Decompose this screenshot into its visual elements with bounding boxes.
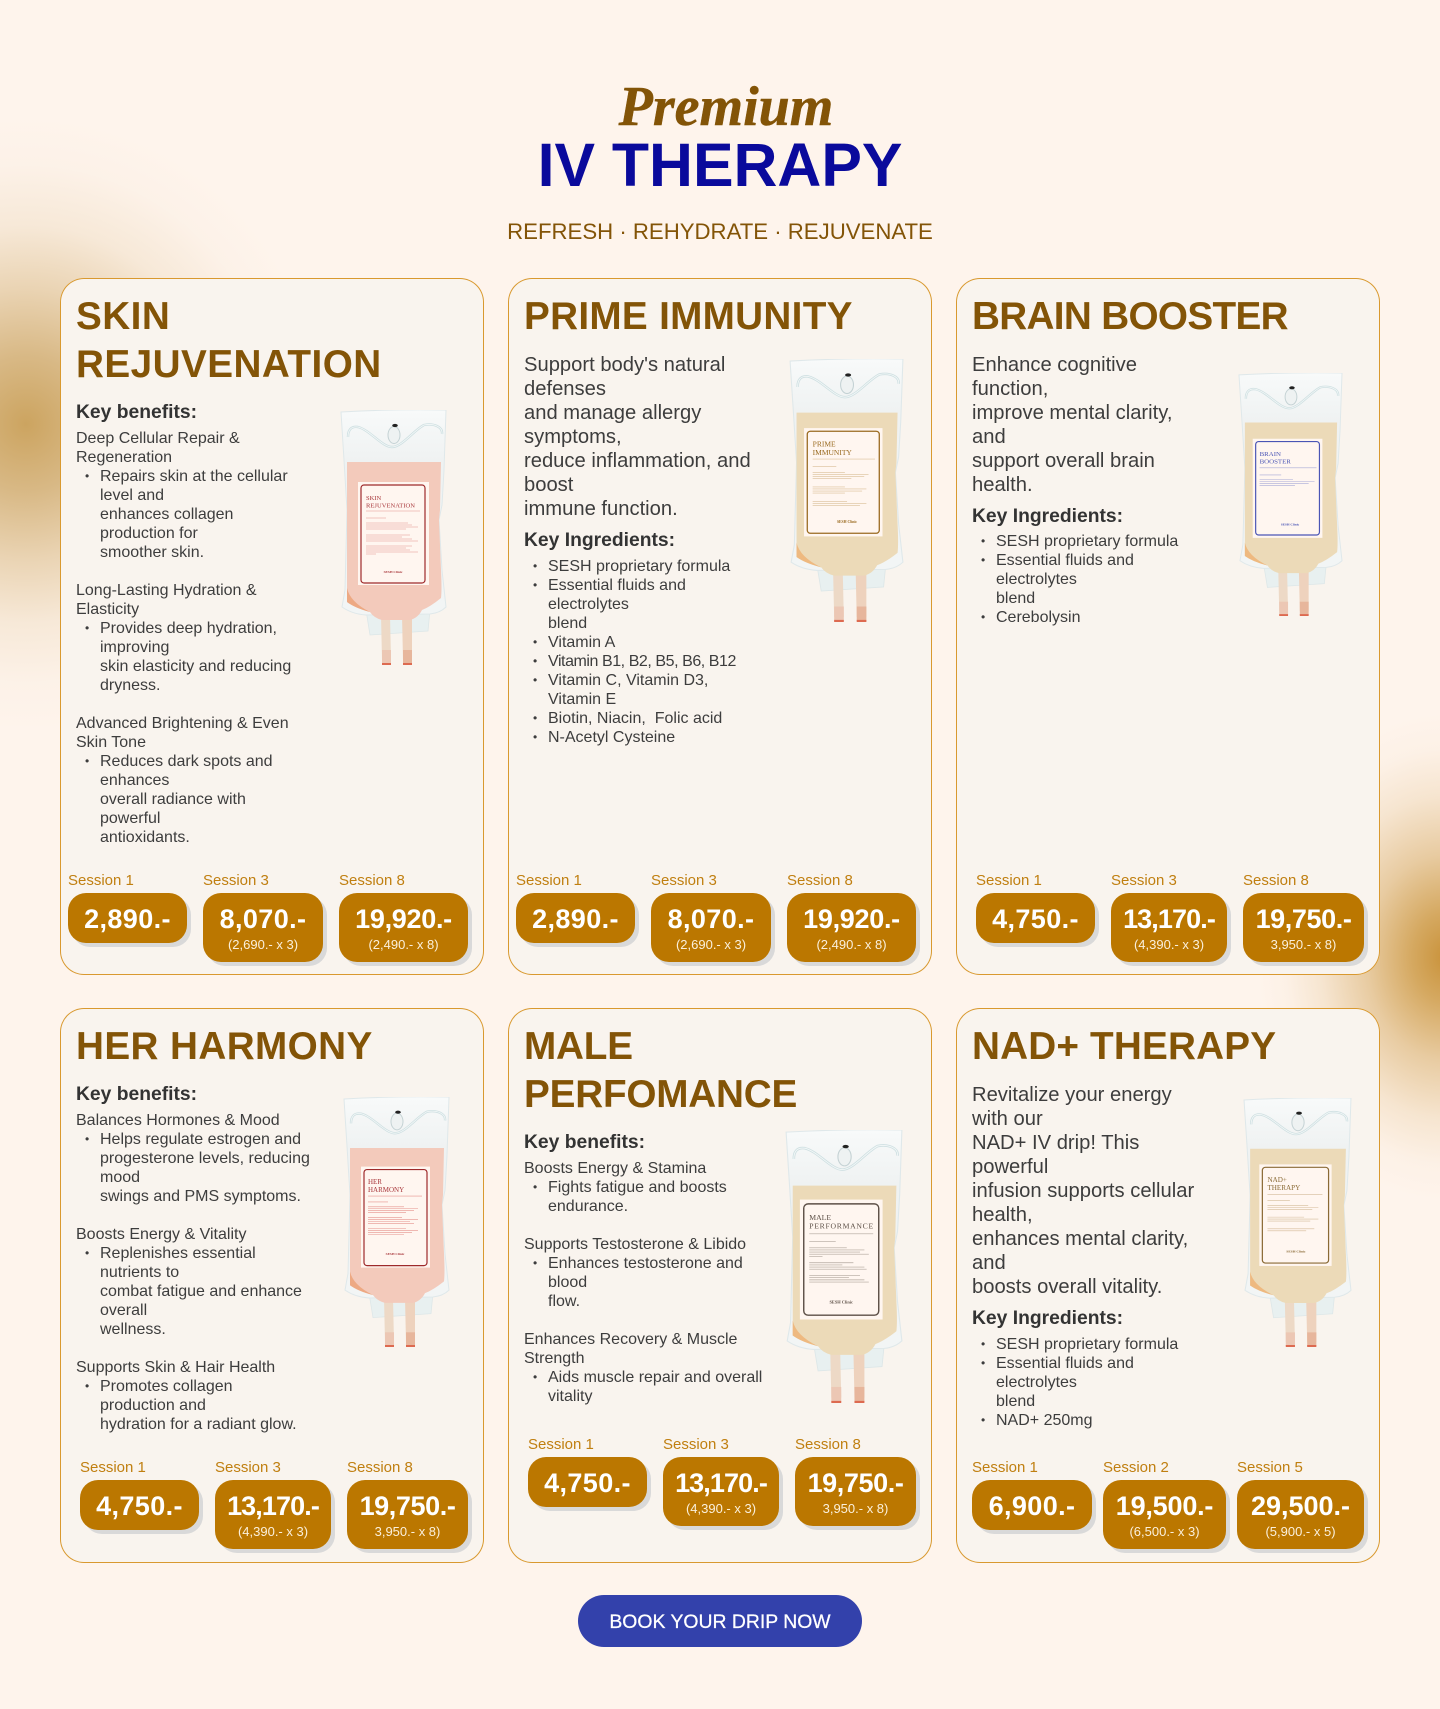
button: book your drip now (578, 1595, 862, 1647)
benefits list: production and (100, 1396, 206, 1414)
panel: skin rejuvenation (60, 278, 484, 975)
session 8 price (787, 872, 920, 966)
ingredients list (982, 532, 1178, 626)
benefits list: antioxidants. (100, 828, 190, 846)
benefits list: dryness. (100, 676, 160, 694)
ingredients list: blend (996, 1392, 1035, 1410)
title: Premium: Premium (619, 76, 833, 138)
intro text: improve mental clarity, (972, 402, 1172, 424)
benefits list: nutrients to (100, 1264, 179, 1280)
session 8 price (1243, 872, 1368, 966)
intro text: health. (972, 474, 1033, 496)
session 3 price: (2,690.- x 3) (228, 937, 298, 952)
intro text: Revitalize your energy (972, 1084, 1172, 1106)
icon: IV bag her harmony: HARMONY (368, 1187, 404, 1194)
benefits list: Deep Cellular Repair & (76, 430, 240, 446)
session 8 price: 3,950.- x 8) (1271, 937, 1336, 952)
ingredients list: Vitamin B1, B2, B5, B6, B12 (548, 652, 736, 670)
ingredients list (982, 1336, 1178, 1428)
session 8 price (347, 1458, 472, 1553)
heading (524, 1025, 797, 1116)
session 3 price (1111, 872, 1231, 966)
ingredients list: Biotin, Niacin, Folic acid (548, 710, 722, 726)
benefits list (76, 1112, 310, 1432)
session 1 price: Session 1 (528, 1436, 594, 1452)
ingredients list: Vitamin C, Vitamin D3, (548, 672, 708, 688)
key ingredients heading: Key Ingredients: (524, 530, 675, 551)
benefits list: skin elasticity and reducing (100, 658, 291, 674)
session 1 price: 2,890.- (532, 904, 619, 934)
heading: SKIN (76, 295, 170, 338)
intro text: infusion supports cellular (972, 1180, 1194, 1202)
benefits list: improving (100, 638, 169, 656)
icon: IV bag nad+ therapy: NAD+ (1267, 1176, 1287, 1184)
key ingredients heading: Key Ingredients: (972, 506, 1123, 527)
icon: IV bag male performance (786, 1130, 902, 1403)
icon: IV bag male performance: PERFORMANCE (809, 1222, 874, 1230)
benefits list: Provides deep hydration, (100, 620, 277, 636)
benefits list: wellness. (100, 1320, 166, 1338)
ingredients list: electrolytes (548, 596, 629, 612)
session 1 price: 4,750.- (992, 904, 1079, 934)
session 3 price: (4,390.- x 3) (1134, 937, 1204, 952)
session 5 price: Session 5 (1237, 1458, 1303, 1476)
heading: REJUVENATION (76, 343, 382, 386)
benefits list: mood (100, 1168, 140, 1186)
ingredients list: SESH proprietary formula (996, 532, 1178, 550)
benefits list: Boosts Energy & Vitality (76, 1226, 246, 1242)
intro text: Support body's natural (524, 354, 725, 376)
session 1 price: 4,750.- (544, 1468, 631, 1498)
session 3 price (651, 872, 775, 966)
session 8 price (795, 1436, 920, 1530)
session 3 price: Session 3 (215, 1458, 281, 1476)
session 8 price: 3,950.- x 8) (375, 1524, 440, 1539)
panel: male performance (508, 1008, 932, 1563)
session 3 price (203, 872, 327, 966)
button: book your drip now: BOOK YOUR DRIP NOW (609, 1611, 831, 1633)
intro text: immune function. (524, 498, 678, 520)
benefits list: Supports Skin & Hair Health (76, 1358, 275, 1376)
icon: IV bag skin rejuvenation: REJUVENATION (366, 502, 415, 510)
icon: IV bag brain booster: BOOSTER (1260, 459, 1291, 465)
session 3 price: 13,170.- (227, 1491, 319, 1521)
session 8 price (339, 872, 472, 966)
benefits list: vitality (548, 1388, 592, 1404)
benefits list: Balances Hormones & Mood (76, 1112, 280, 1128)
icon: IV bag prime immunity: IMMUNITY (813, 448, 853, 457)
session 3 price: (2,690.- x 3) (676, 937, 746, 952)
session 2 price: 19,500.- (1116, 1491, 1213, 1521)
ingredients list: electrolytes (996, 570, 1077, 588)
heading: HER HARMONY (76, 1025, 373, 1068)
benefits list (76, 430, 291, 846)
benefits list: swings and PMS symptoms. (100, 1188, 301, 1204)
heading (76, 295, 382, 386)
ingredients list: Cerebolysin (996, 608, 1080, 626)
session 2 price: Session 2 (1103, 1458, 1169, 1476)
session 1 price: Session 1 (80, 1458, 146, 1476)
key benefits heading: Key benefits: (76, 402, 197, 423)
session 1 price: Session 1 (972, 1458, 1038, 1476)
icon: IV bag prime immunity: SESH Clinic (837, 520, 857, 524)
icon: IV bag brain booster: SESH Clinic (1281, 523, 1300, 526)
benefits list: progesterone levels, reducing (100, 1150, 310, 1166)
session 3 price: 13,170.- (1123, 904, 1215, 934)
session 3 price: Session 3 (203, 872, 269, 888)
session 8 price: Session 8 (787, 872, 853, 888)
session 8 price: 19,750.- (360, 1491, 455, 1521)
benefits list: Replenishes essential (100, 1244, 256, 1262)
ingredients list: Essential fluids and (996, 1354, 1134, 1372)
session 5 price (1237, 1458, 1368, 1553)
intro text: and manage allergy (524, 402, 701, 424)
benefits list: Skin Tone (76, 734, 146, 750)
ingredients list: electrolytes (996, 1374, 1077, 1390)
benefits list: Elasticity (76, 600, 139, 618)
session 8 price: Session 8 (339, 872, 405, 888)
session 8 price: Session 8 (795, 1436, 861, 1452)
session 2 price (1103, 1458, 1230, 1553)
session 8 price: 19,750.- (808, 1468, 903, 1498)
heading: PRIME IMMUNITY (524, 295, 853, 338)
intro text: NAD+ IV drip! This (972, 1132, 1139, 1154)
benefits list: level and (100, 486, 164, 504)
session 1 price: 2,890.- (84, 904, 171, 934)
session 3 price (215, 1458, 335, 1553)
benefits list: endurance. (548, 1198, 628, 1214)
benefits list: Repairs skin at the cellular (100, 468, 288, 484)
session 1 price (80, 1458, 203, 1534)
session 1 price (976, 872, 1099, 947)
ingredients list: SESH proprietary formula (548, 558, 730, 574)
session 8 price: Session 8 (1243, 872, 1309, 888)
benefits list: Long-Lasting Hydration & (76, 582, 257, 598)
icon: IV bag nad+ therapy: THERAPY (1267, 1184, 1300, 1192)
session 8 price: 19,750.- (1256, 904, 1351, 934)
ingredients list: SESH proprietary formula (996, 1336, 1178, 1352)
session 3 price: 13,170.- (675, 1468, 767, 1498)
ingredients list: Vitamin A (548, 634, 615, 650)
benefits list: production for (100, 524, 198, 542)
icon: IV bag male performance: SESH Clinic (829, 1299, 853, 1304)
icon: IV bag her harmony: HER (368, 1179, 382, 1186)
ingredients list: Essential fluids and (996, 552, 1134, 568)
tagline: REFRESH · REHYDRATE · REJUVENATE (507, 219, 933, 244)
benefits list: combat fatigue and enhance (100, 1282, 302, 1300)
title: IV Therapy: IV THERAPY (538, 131, 902, 199)
intro text: boost (524, 474, 573, 496)
intro text: with our (972, 1108, 1043, 1130)
key ingredients heading: Key Ingredients: (972, 1308, 1123, 1329)
heading: NAD+ THERAPY (972, 1025, 1276, 1068)
session 5 price: (5,900.- x 5) (1265, 1524, 1336, 1539)
intro text: support overall brain (972, 450, 1155, 472)
benefits list: overall radiance with (100, 790, 246, 808)
intro text: function, (972, 378, 1048, 400)
intro text: boosts overall vitality. (972, 1276, 1162, 1298)
benefits list: Boosts Energy & Stamina (524, 1160, 706, 1176)
benefits list: enhances (100, 772, 169, 788)
benefits list: Fights fatigue and boosts (548, 1178, 727, 1196)
icon: IV bag nad+ therapy (1244, 1098, 1352, 1347)
benefits list: smoother skin. (100, 544, 204, 560)
session 1 price: Session 1 (976, 872, 1042, 888)
session 1 price: 4,750.- (96, 1491, 183, 1521)
icon: IV bag her harmony (344, 1097, 450, 1347)
session 8 price: 3,950.- x 8) (823, 1501, 888, 1516)
heading: BRAIN BOOSTER (972, 295, 1288, 338)
session 1 price (516, 872, 639, 947)
panel: brain booster (956, 278, 1380, 975)
intro text: symptoms, (524, 426, 622, 448)
benefits list: Regeneration (76, 448, 172, 466)
benefits list: Helps regulate estrogen and (100, 1130, 301, 1148)
session 8 price: (2,490.- x 8) (368, 937, 439, 952)
intro text: reduce inflammation, and (524, 450, 751, 472)
session 1 price (972, 1458, 1096, 1534)
session 3 price: 8,070.- (220, 904, 306, 934)
session 1 price: Session 1 (68, 872, 134, 888)
icon: IV bag brain booster: BRAIN (1260, 451, 1281, 458)
session 2 price: (6,500.- x 3) (1129, 1524, 1200, 1539)
icon: IV bag male performance: MALE (809, 1213, 831, 1222)
panel: prime immunity (508, 278, 932, 975)
icon: IV bag prime immunity: PRIME (813, 440, 836, 449)
intro text (524, 354, 751, 520)
intro text: and (972, 426, 1006, 448)
intro text: and (972, 1252, 1006, 1274)
benefits list: Reduces dark spots and (100, 752, 273, 770)
icon: IV bag skin rejuvenation (340, 410, 446, 665)
benefits list: powerful (100, 810, 160, 826)
benefits list: Enhances testosterone and (548, 1254, 743, 1272)
ingredients list: NAD+ 250mg (996, 1412, 1092, 1428)
session 3 price: Session 3 (663, 1436, 729, 1452)
benefits list: enhances collagen (100, 506, 233, 522)
session 1 price: Session 1 (516, 872, 582, 888)
session 3 price (663, 1436, 783, 1530)
session 3 price: 8,070.- (668, 904, 754, 934)
panel: nad+ therapy (956, 1008, 1380, 1563)
benefits list (524, 1160, 762, 1404)
panel: her harmony (60, 1008, 484, 1563)
session 3 price: Session 3 (651, 872, 717, 888)
key benefits heading: Key benefits: (76, 1084, 197, 1105)
session 8 price: 19,920.- (355, 904, 452, 934)
ingredients list: N-Acetyl Cysteine (548, 728, 675, 746)
icon: IV bag brain booster (1238, 373, 1342, 616)
benefits list: Supports Testosterone & Libido (524, 1236, 746, 1252)
benefits list: blood (548, 1274, 587, 1290)
session 3 price: (4,390.- x 3) (686, 1501, 756, 1516)
benefits list: Aids muscle repair and overall (548, 1368, 762, 1386)
key benefits heading: Key benefits: (524, 1132, 645, 1153)
intro text: health, (972, 1204, 1033, 1226)
benefits list: Enhances Recovery & Muscle (524, 1330, 737, 1348)
intro text (972, 1084, 1194, 1298)
icon: IV bag prime immunity (790, 359, 904, 622)
benefits list: Promotes collagen (100, 1378, 233, 1394)
session 1 price (528, 1436, 651, 1511)
session 8 price: (2,490.- x 8) (816, 937, 887, 952)
intro text: Enhance cognitive (972, 354, 1137, 376)
ingredients list: Vitamin E (548, 690, 616, 708)
ingredients list: blend (548, 614, 587, 632)
intro text: defenses (524, 378, 606, 400)
benefits list: Advanced Brightening & Even (76, 714, 289, 732)
icon: IV bag nad+ therapy: SESH Clinic (1286, 1249, 1306, 1253)
session 3 price: (4,390.- x 3) (238, 1524, 308, 1539)
icon: IV bag her harmony: SESH Clinic (386, 1252, 405, 1256)
session 3 price: Session 3 (1111, 872, 1177, 888)
benefits list: flow. (548, 1292, 580, 1310)
intro text: enhances mental clarity, (972, 1228, 1188, 1250)
heading: MALE (524, 1025, 633, 1068)
session 1 price: 6,900.- (989, 1491, 1075, 1521)
benefits list: overall (100, 1302, 147, 1318)
benefits list: hydration for a radiant glow. (100, 1416, 297, 1432)
intro text (972, 354, 1172, 496)
heading: PERFOMANCE (524, 1073, 797, 1116)
session 5 price: 29,500.- (1251, 1491, 1350, 1521)
icon: IV bag skin rejuvenation: SESH Clinic (384, 570, 403, 574)
ingredients list: blend (996, 590, 1035, 606)
session 8 price: Session 8 (347, 1458, 413, 1476)
benefits list: Strength (524, 1350, 584, 1366)
intro text: powerful (972, 1156, 1048, 1178)
session 8 price: 19,920.- (803, 904, 900, 934)
ingredients list (534, 558, 736, 746)
session 1 price (68, 872, 191, 947)
icon: IV bag skin rejuvenation: SKIN (366, 495, 381, 502)
ingredients list: Essential fluids and (548, 576, 686, 594)
